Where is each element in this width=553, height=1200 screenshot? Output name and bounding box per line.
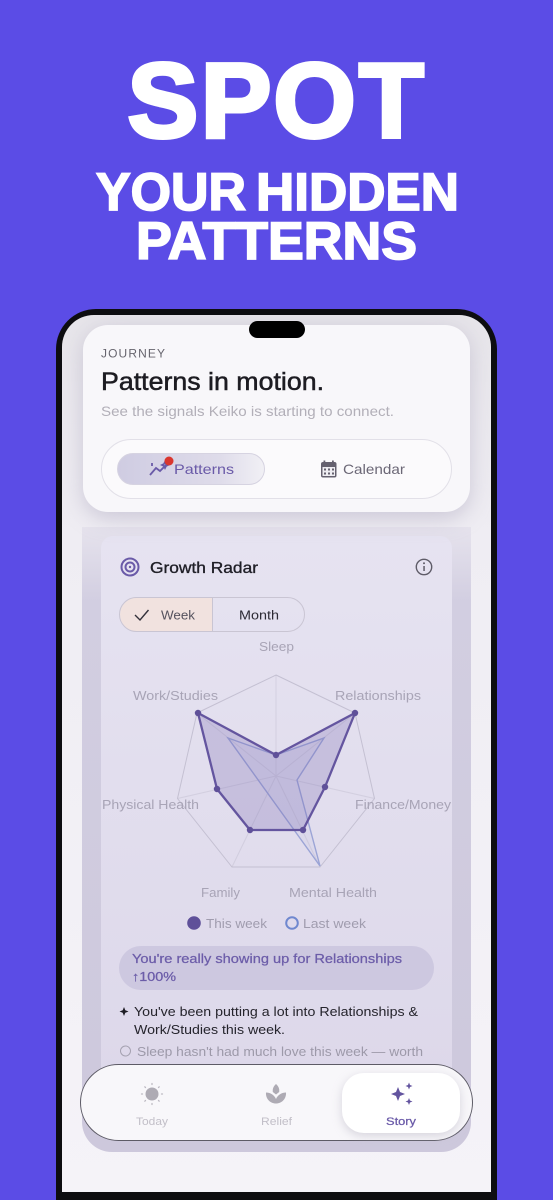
tab: patterns	[118, 454, 264, 484]
axis labels: Relationships	[335, 688, 422, 703]
insight: sleep: Sleep hasn't had much love this week — worth	[137, 1044, 423, 1059]
tab: calendar: Calendar	[343, 461, 405, 477]
tabs	[102, 440, 452, 498]
nav item: story: Story	[386, 1116, 417, 1128]
legend	[187, 916, 367, 931]
nav item: relief: Relief	[261, 1116, 293, 1128]
subtitle: your hidden patterns: HIDDEN	[256, 163, 459, 222]
axis labels: Mental Health	[289, 885, 377, 900]
panel: journey header	[83, 325, 470, 519]
nav item: today: Today	[136, 1116, 169, 1128]
insight: relationships and work: You've been putting a lot into Relationships &	[134, 1004, 418, 1019]
callout: relationships up	[119, 946, 434, 990]
title: SPOT: SPOT	[128, 42, 424, 160]
nav item: relief	[262, 1084, 292, 1125]
text: subtitle: See the signals Keiko is starting to connect.	[101, 403, 394, 419]
heading: growth radar: Growth Radar	[150, 560, 259, 577]
axis labels: Family	[201, 885, 241, 900]
callout: relationships up: ↑100%	[132, 969, 176, 984]
panel: growth radar card	[101, 536, 452, 1080]
insight: relationships and work	[120, 1006, 418, 1034]
toggle: week month: Month	[239, 608, 279, 622]
screen content	[80, 321, 472, 1152]
subtitle: your hidden patterns	[96, 163, 459, 271]
axis labels: Sleep	[259, 639, 294, 654]
phone frame	[56, 309, 497, 1200]
panel: bottom navigation	[80, 1064, 472, 1140]
radar grid	[178, 675, 374, 867]
axis labels: Finance/Money	[355, 797, 452, 812]
subtitle: your hidden patterns: PATTERNS	[136, 212, 417, 271]
legend: Last week	[303, 916, 367, 931]
heading: patterns in motion: Patterns in motion.	[101, 368, 324, 396]
legend: This week	[206, 916, 268, 931]
series: last week	[228, 738, 324, 866]
callout: relationships up: You're really showing up for Relationships	[132, 951, 403, 966]
icon: info	[416, 559, 432, 575]
nav item: story	[342, 1073, 460, 1136]
insight: relationships and work: Work/Studies this week.	[134, 1022, 285, 1037]
nav item: today	[136, 1084, 169, 1128]
toggle: week month: Week	[161, 608, 196, 622]
axis labels	[102, 639, 452, 900]
tab: patterns: Patterns	[174, 461, 234, 477]
icon: radar target	[122, 558, 138, 576]
axis labels: Work/Studies	[133, 688, 219, 703]
subtitle: your hidden patterns: YOUR	[96, 163, 246, 222]
label: journey: JOURNEY	[101, 346, 165, 360]
series: this week	[195, 710, 358, 833]
panel: radar backdrop	[82, 527, 471, 1152]
axis labels: Physical Health	[102, 797, 199, 812]
radar chart	[102, 639, 452, 900]
tab: calendar	[321, 460, 405, 478]
toggle: week month	[120, 598, 304, 632]
camera notch	[249, 321, 305, 338]
